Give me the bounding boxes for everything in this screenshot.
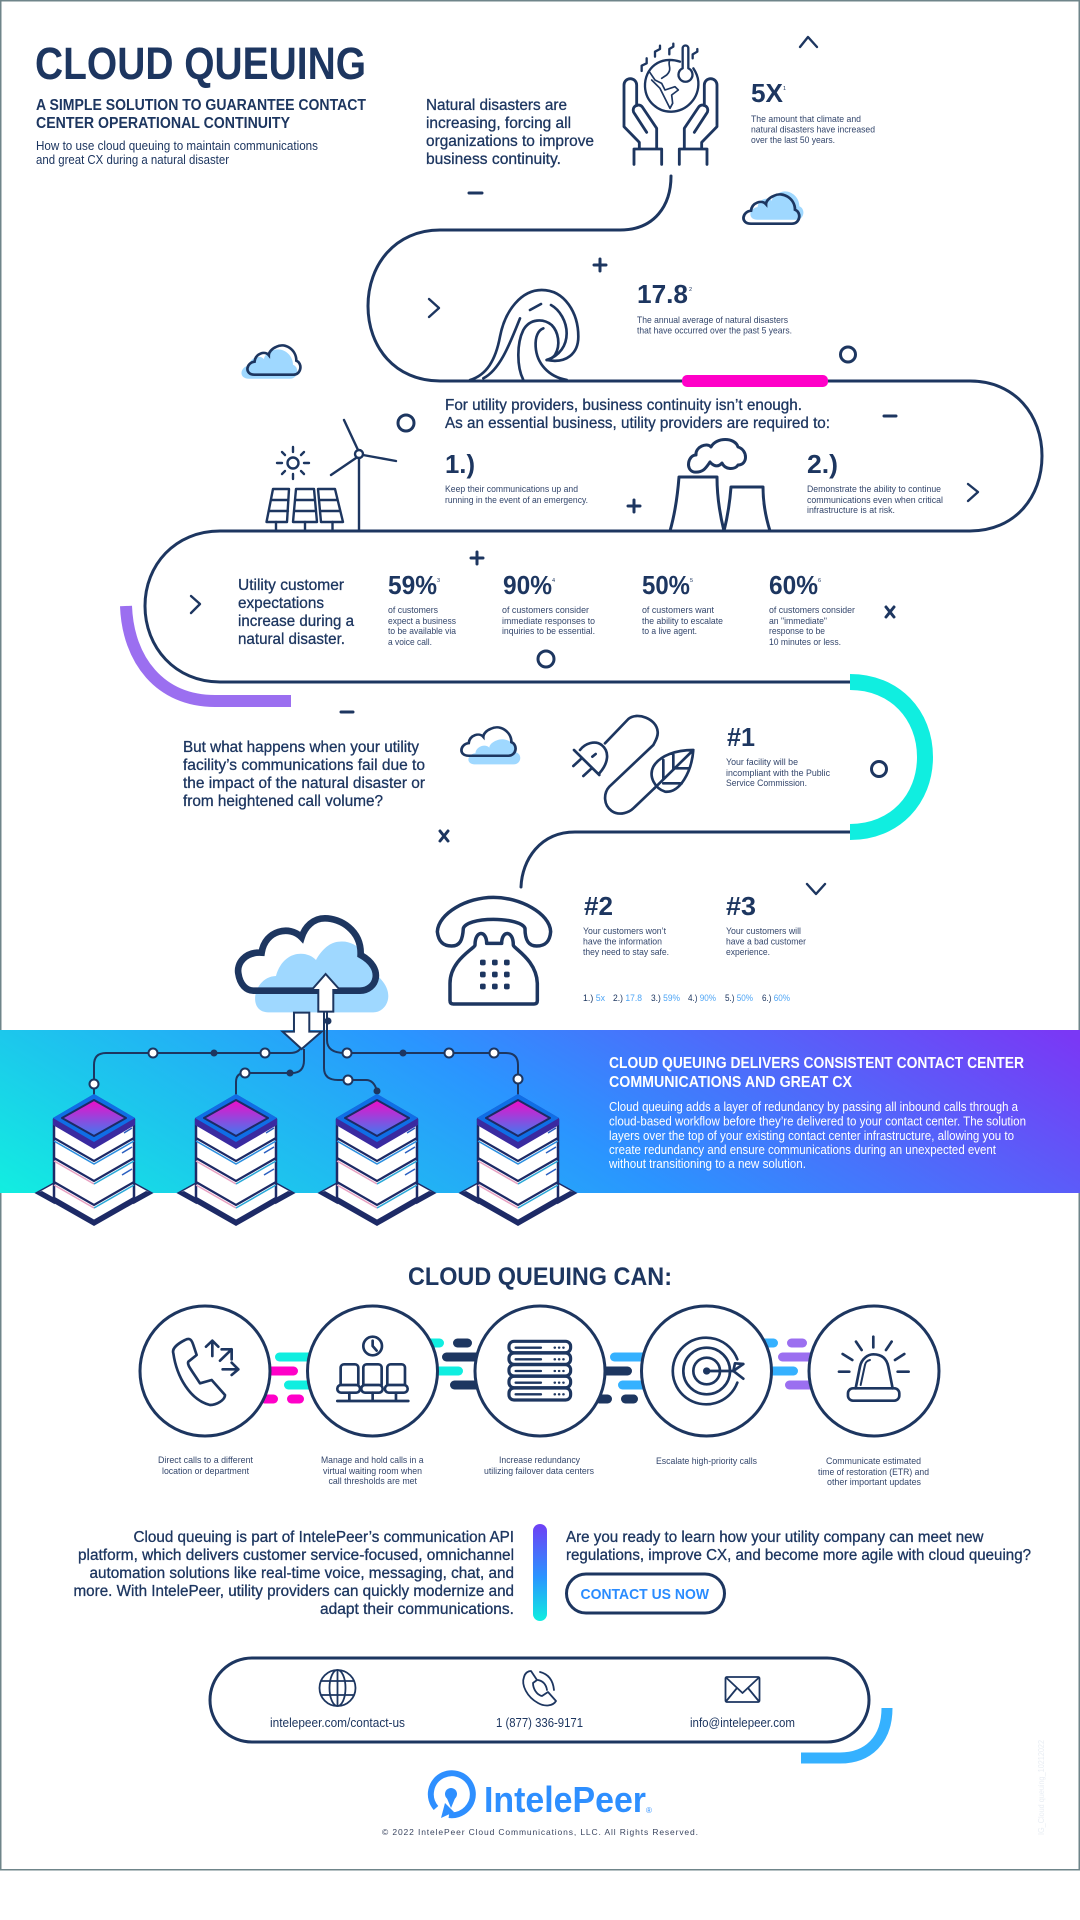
- icon: plug and leaf: [573, 716, 693, 814]
- requirement 2: 2.): [807, 449, 838, 479]
- intro statement: business continuity.: [426, 151, 561, 168]
- icon: cloud left: [241, 345, 300, 379]
- stat: 5X: [751, 78, 875, 146]
- consequence #1: Your facility will be: [726, 757, 798, 768]
- icon: seats and clock: [337, 1337, 408, 1401]
- capability circle: waiting room: [308, 1306, 438, 1436]
- consequence #3: [726, 891, 806, 958]
- capability captions: virtual waiting room when: [323, 1466, 422, 1477]
- consequence #3: #3: [726, 891, 756, 921]
- capability captions: [158, 1455, 929, 1488]
- server 3: [319, 1094, 435, 1226]
- copyright: © 2022 IntelePeer Cloud Communications, LLC. All Rights Reserved.: [382, 1827, 698, 1837]
- capability circle: alert: [809, 1306, 939, 1436]
- icon: envelope: [726, 1677, 760, 1702]
- logo: IntelePeer: [431, 1773, 652, 1820]
- icon: wave: [470, 290, 578, 380]
- call to action: Are you ready to learn how your utility company can meet new: [566, 1529, 984, 1546]
- closing paragraph left: automation solutions like real-time voice, messaging, chat, and: [90, 1565, 514, 1582]
- icon: cloud middle: [461, 727, 520, 764]
- contact details: info@intelepeer.com: [690, 1716, 795, 1730]
- stat: 50%: [642, 570, 723, 637]
- requirement 1: 1.): [445, 449, 475, 479]
- question statement: the impact of the natural disaster or: [183, 775, 426, 792]
- icon: target: [673, 1338, 743, 1404]
- stat: 50%: 5: [690, 578, 693, 584]
- customer expectations statement: expectations: [238, 595, 324, 612]
- requirement 2: [807, 449, 943, 516]
- band text: without transitioning to a new solution.: [608, 1156, 806, 1171]
- consequence #3: experience.: [726, 947, 770, 958]
- footnote references: [583, 993, 790, 1003]
- capability captions: location or department: [162, 1466, 249, 1477]
- consequence #2: Your customers won’t: [583, 926, 666, 937]
- accent: purple arc: [126, 606, 291, 701]
- stat: 60%: 6: [818, 578, 821, 584]
- consequence #1: incompliant with the Public: [726, 768, 830, 779]
- icon: logo speech mark: [431, 1773, 473, 1818]
- subtitle: CENTER OPERATIONAL CONTINUITY: [36, 115, 291, 132]
- band text: cloud-based workflow before they’re delivered to your contact center. The solution: [609, 1114, 1026, 1128]
- icon: cloud with up and down arrows: [238, 918, 388, 1049]
- contact pill: [210, 1658, 869, 1742]
- stat: 50%: to a live agent.: [642, 626, 697, 637]
- stat: 59%: of customers: [388, 605, 438, 616]
- capability captions: Manage and hold calls in a: [321, 1455, 424, 1466]
- customer expectations statement: [238, 577, 354, 648]
- connector bars: [260, 1338, 818, 1404]
- capability captions: utilizing failover data centers: [484, 1466, 594, 1477]
- stat: 90%: 4: [552, 578, 555, 584]
- footnote references: 5.) 50%: [725, 993, 753, 1003]
- question statement: [183, 739, 426, 810]
- server 2: [178, 1094, 294, 1226]
- stat: 90%: of customers consider: [502, 605, 589, 616]
- intro line: and great CX during a natural disaster: [36, 152, 230, 167]
- intro line: How to use cloud queuing to maintain communications: [36, 138, 318, 153]
- stat: 50%: 50%: [642, 570, 690, 600]
- stat: 90%: 90%: [503, 570, 552, 600]
- closing paragraph left: adapt their communications.: [320, 1601, 514, 1618]
- utility providers statement: As an essential business, utility providers are required to:: [445, 415, 830, 432]
- band text: create redundancy and ensure communications during an unexpected event: [609, 1142, 996, 1157]
- icon: phone: [523, 1671, 556, 1705]
- capability captions: Communicate estimated: [826, 1456, 921, 1467]
- accent: magenta bar: [682, 375, 828, 387]
- question statement: facility’s communications fail due to: [183, 757, 425, 774]
- heading: cloud queuing can: CLOUD QUEUING CAN:: [408, 1263, 672, 1291]
- band text: CLOUD QUEUING DELIVERS CONSISTENT CONTACT CENTER: [609, 1055, 1024, 1072]
- band text: Cloud queuing adds a layer of redundancy by passing all inbound calls through a: [609, 1099, 1019, 1114]
- band text: [608, 1055, 1026, 1171]
- closing paragraph left: more. With IntelePeer, utility providers can quickly modernize and: [74, 1583, 514, 1600]
- button: contact us now: [566, 1574, 724, 1613]
- consequence #2: have the information: [583, 936, 662, 948]
- stat: 60%: of customers consider: [769, 605, 855, 616]
- footnote references: 6.) 60%: [762, 993, 790, 1003]
- requirement 1: running in the event of an emergency.: [445, 495, 588, 506]
- accent: cyan arc: [850, 682, 925, 832]
- consequence #3: have a bad customer: [726, 936, 806, 948]
- logo: IntelePeer: ®: [646, 1806, 652, 1815]
- footnote references: 1.) 5x: [583, 993, 605, 1003]
- icon: server rack: [509, 1341, 571, 1400]
- gradient band: [0, 1030, 1080, 1193]
- icon: cooling towers: [670, 440, 770, 531]
- stat: 90%: [502, 570, 595, 637]
- decorative marks: [191, 37, 978, 894]
- stat: 17.8: 17.8: [637, 279, 688, 309]
- band text: COMMUNICATIONS AND GREAT CX: [609, 1074, 853, 1091]
- capability captions: Increase redundancy: [499, 1455, 580, 1466]
- stat: 5X: 1: [783, 86, 786, 92]
- stat: 5X: over the last 50 years.: [751, 135, 835, 146]
- intro statement: Natural disasters are: [426, 97, 567, 114]
- stat: 17.8: The annual average of natural disasters: [637, 315, 788, 326]
- stat: 50%: the ability to escalate: [642, 616, 723, 627]
- capability circle: direct calls: [140, 1306, 270, 1436]
- requirement 1: [445, 449, 588, 506]
- call to action: regulations, improve CX, and become more agile with cloud queuing?: [566, 1547, 1031, 1564]
- main winding path: [145, 176, 1042, 887]
- stat: 90%: immediate responses to: [502, 616, 595, 627]
- icon: siren: [839, 1337, 909, 1401]
- gradient divider: [533, 1524, 547, 1621]
- stat: 60%: 60%: [769, 570, 818, 600]
- stat: 90%: inquiries to be essential.: [502, 626, 595, 637]
- capability circle: escalate: [642, 1306, 772, 1436]
- closing paragraph left: Cloud queuing is part of IntelePeer’s communication API: [134, 1529, 514, 1546]
- requirement 2: Demonstrate the ability to continue: [807, 484, 941, 495]
- icon: cloud top right: [743, 191, 803, 224]
- icon: hands holding hot globe: [624, 44, 717, 164]
- intro statement: increasing, forcing all: [426, 115, 571, 132]
- stat: 59%: 3: [437, 578, 440, 584]
- capability captions: time of restoration (ETR) and: [818, 1467, 929, 1478]
- stat: 50%: of customers want: [642, 605, 714, 616]
- icon: rotary telephone: [437, 897, 551, 1004]
- utility providers statement: For utility providers, business continuity isn’t enough.: [445, 397, 802, 414]
- consequence #1: Service Commission.: [726, 778, 807, 789]
- stat: 5X: natural disasters have increased: [751, 124, 875, 136]
- servers: [36, 1094, 576, 1226]
- intro line: [36, 138, 318, 167]
- stat: 60%: 10 minutes or less.: [769, 637, 841, 648]
- requirement 2: communications even when critical: [807, 495, 943, 506]
- stat: 17.8: that have occurred over the past 5 years.: [637, 326, 792, 336]
- intro statement: [426, 97, 594, 168]
- stat: 17.8: 2: [689, 287, 692, 293]
- requirement 2: infrastructure is at risk.: [807, 505, 895, 516]
- network connector lines: [90, 1012, 522, 1095]
- consequence #2: they need to stay safe.: [583, 947, 669, 958]
- stat: 59%: 59%: [388, 570, 437, 600]
- footnote references: 3.) 59%: [651, 993, 680, 1003]
- footnote references: 4.) 90%: [688, 993, 716, 1003]
- capability captions: Direct calls to a different: [158, 1455, 253, 1466]
- consequence #2: #2: [584, 891, 613, 921]
- watermark: IG_Cloud queuing_10212022: [1037, 1740, 1046, 1835]
- stat: 59%: a voice call.: [388, 637, 432, 648]
- icon: phone with arrows: [173, 1339, 238, 1405]
- consequence #1: [726, 722, 830, 789]
- subtitle: A SIMPLE SOLUTION TO GUARANTEE CONTACT: [36, 97, 366, 114]
- contact details: 1 (877) 336-9171: [496, 1716, 583, 1730]
- capability captions: Escalate high-priority calls: [656, 1456, 757, 1467]
- capability captions: call thresholds are met: [328, 1476, 417, 1487]
- icon: globe: [320, 1670, 356, 1706]
- stat: 59%: expect a business: [388, 616, 456, 627]
- server 4: [460, 1094, 576, 1226]
- closing paragraph left: [74, 1529, 514, 1618]
- question statement: from heightened call volume?: [183, 793, 383, 810]
- customer expectations statement: natural disaster.: [238, 631, 345, 648]
- closing paragraph left: platform, which delivers customer service-focused, omnichannel: [78, 1547, 514, 1564]
- button: contact us now: CONTACT US NOW: [580, 1586, 710, 1603]
- capability captions: other important updates: [827, 1477, 921, 1488]
- question statement: But what happens when your utility: [183, 739, 419, 756]
- contact details: intelepeer.com/contact-us: [270, 1716, 405, 1730]
- header block: [35, 38, 366, 167]
- capability circle: redundancy: [475, 1306, 605, 1436]
- requirement 1: Keep their communications up and: [445, 484, 578, 495]
- stat: 5X: The amount that climate and: [751, 114, 861, 125]
- call to action: [566, 1529, 1031, 1613]
- customer expectations statement: increase during a: [238, 613, 354, 630]
- footnote references: 2.) 17.8: [613, 993, 642, 1003]
- stat: 59%: [388, 570, 457, 648]
- stat: 60%: an "immediate": [769, 616, 827, 627]
- stat: 60%: response to be: [769, 626, 825, 637]
- customer expectations statement: Utility customer: [238, 577, 345, 594]
- icon: solar panels, sun and wind turbine: [266, 420, 396, 531]
- contact details: [270, 1716, 795, 1730]
- stat: 5X: 5X: [751, 78, 784, 108]
- server 1: [36, 1094, 152, 1226]
- consequence #2: [583, 891, 669, 958]
- consequence #3: Your customers will: [726, 926, 801, 937]
- band text: layers over the top of your existing contact center infrastructure, allowing you to: [609, 1128, 1014, 1143]
- stat: 17.8: [637, 279, 792, 336]
- title: CLOUD QUEUING: [35, 38, 366, 89]
- stat: 59%: to be available via: [388, 626, 457, 637]
- consequence #1: #1: [727, 722, 755, 752]
- logo: IntelePeer: IntelePeer: [484, 1779, 646, 1820]
- utility providers statement: [445, 397, 830, 432]
- accent: blue arc: [801, 1708, 887, 1758]
- subtitle: [36, 97, 366, 132]
- stat: 60%: [769, 570, 855, 648]
- intro statement: organizations to improve: [426, 133, 594, 150]
